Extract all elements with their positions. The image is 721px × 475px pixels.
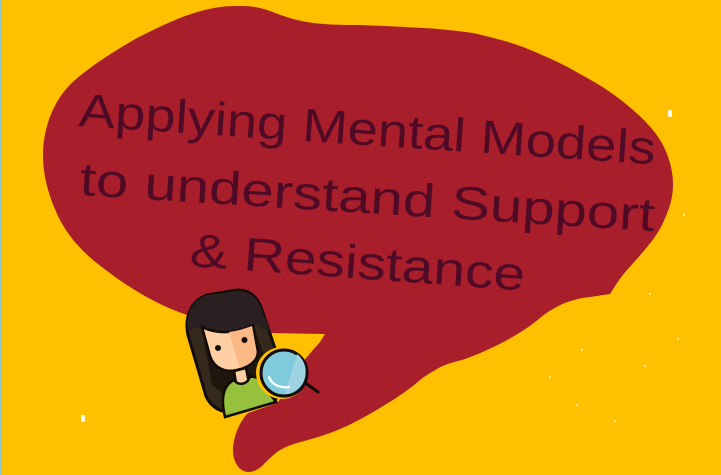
hair top: [187, 291, 271, 332]
title line 1: Applying Mental Models: [77, 83, 658, 174]
title line 3: & Resistance: [188, 223, 527, 301]
magnifier glare: [285, 354, 306, 394]
title: [77, 83, 658, 301]
icon: woman with magnifying glass: [187, 290, 318, 417]
magnifier handle: [304, 382, 318, 392]
inner shadow of hair: [201, 324, 270, 395]
face shade: [229, 326, 257, 368]
hair back: [187, 290, 283, 411]
shirt: [223, 376, 276, 417]
magnifier highlight: [269, 377, 289, 387]
sparkles: [81, 110, 685, 422]
eye left: [215, 345, 221, 351]
face: [202, 325, 258, 371]
magnifier lens: [261, 350, 307, 396]
title line 2: to understand Support: [78, 152, 657, 241]
magnifier yellow halo: [256, 347, 308, 399]
neck: [234, 368, 248, 385]
eye right: [242, 337, 248, 343]
